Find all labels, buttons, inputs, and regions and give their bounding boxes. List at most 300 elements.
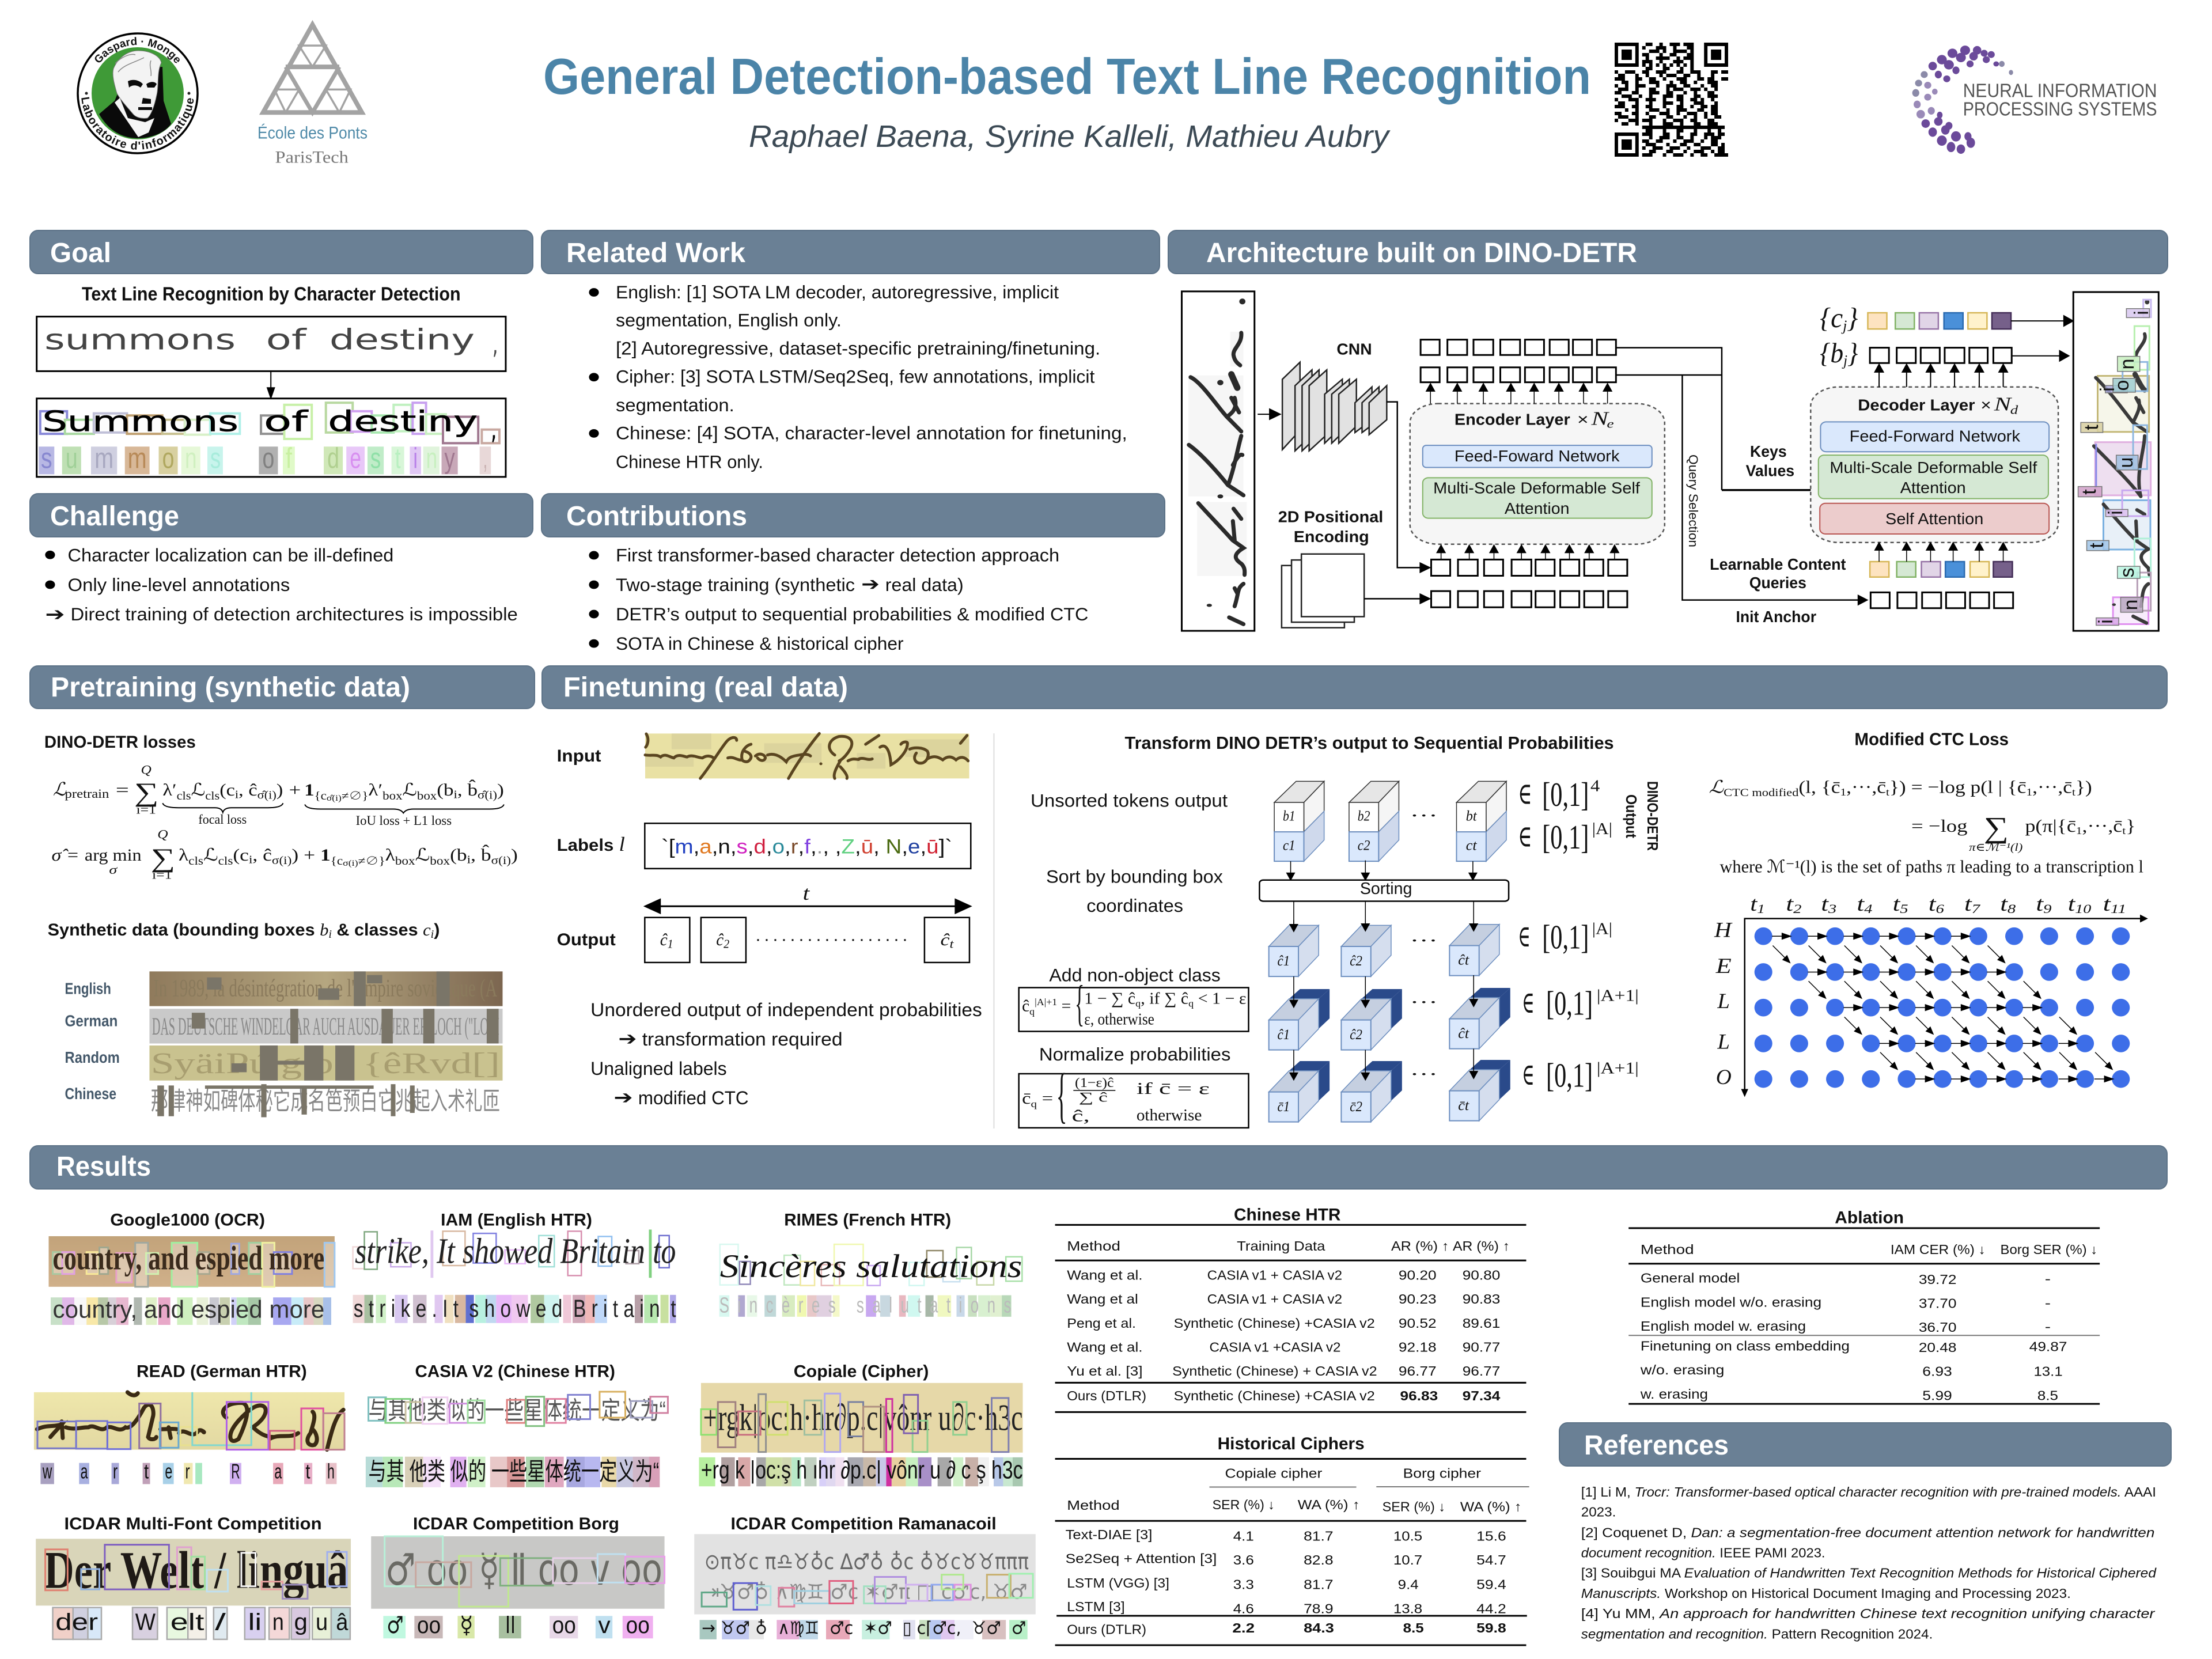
synthetic data heading: & classes [332, 920, 423, 940]
table: Ablation: 49.87 [2029, 1339, 2067, 1354]
pretraining content: DINO-DETR losses [44, 732, 196, 752]
sample: ICDAR Multi-Font: n [272, 1608, 284, 1635]
formula box: non-object class: ĉ [1022, 997, 1041, 1015]
character labels [1714, 918, 1733, 1089]
table: Ablation: English model w/o. erasing [1641, 1295, 1821, 1309]
labels row: Labels [557, 835, 613, 855]
table: Historical Ciphers: 44.2 [1476, 1601, 1506, 1616]
transform to sequential probabilities: [0,1] [1542, 918, 1589, 956]
table: Historical Ciphers: Ours (DTLR) [1067, 1622, 1146, 1637]
contributions bullets: SOTA in Chinese & historical cipher [616, 634, 904, 654]
table: Chinese HTR: 96.77 [1463, 1364, 1500, 1378]
formula: pretrain loss: ℒ [191, 781, 205, 800]
table: Ablation: 36.70 [1919, 1320, 1957, 1335]
formula box: non-object class: q [1135, 998, 1141, 1009]
table: Historical Ciphers: 4.6 [1233, 1601, 1254, 1616]
table: Historical Ciphers: LSTM [3] [1067, 1600, 1125, 1614]
qualitative results grid [36, 1210, 1036, 1639]
encoder layer: Feed-Foward Network [1455, 447, 1620, 465]
logo: Ecole des Ponts ParisTech: ParisTech [275, 147, 349, 166]
formula: matching: σ [109, 863, 118, 877]
contributions bullets: Two-stage training (synthetic [616, 575, 855, 595]
reference list: document recognition. IEEE PAMI 2023. [1581, 1545, 1825, 1560]
sample: ICDAR Multi-Font: li [248, 1608, 262, 1635]
formula: (l, {c̄ [1798, 778, 1840, 797]
transform to sequential probabilities: |A| [1592, 920, 1612, 938]
cubes: non-object class added: ĉ1 [1278, 1026, 1290, 1043]
encoder arrows [1426, 384, 1619, 559]
learnable content queries [1710, 543, 2012, 592]
cubes: unsorted output: ··· [1410, 806, 1438, 825]
table: Ablation: English model w. erasing [1641, 1319, 1806, 1334]
formula: pretrain loss: i [454, 789, 457, 801]
formula box: normalize: (1−ε)ĉ [1075, 1075, 1114, 1090]
table: Historical Ciphers: LSTM (VGG) [3] [1067, 1576, 1169, 1590]
formula: p(π|{c̄ [2025, 816, 2140, 836]
related work bullets: segmentation. [616, 395, 734, 415]
arrow [267, 371, 274, 399]
box tokens: } [1847, 338, 1858, 369]
cubes: unsorted output: ∈ [1518, 777, 1532, 810]
sample: READ labels: R [231, 1460, 240, 1483]
panel: contributions [541, 494, 1165, 654]
formula box: normalize [1019, 1061, 1249, 1129]
time axis labels: t [2036, 892, 2051, 915]
transform to sequential probabilities: < 1 − ε [1194, 990, 1246, 1007]
READ manuscript image [34, 1392, 344, 1450]
formula: pretrain loss: + [289, 781, 301, 800]
panel: results: → ♉♂ ♁ ∧♍♊ ♂c ✶♂ ▯ c⌈♂c, ♉♂ ♂ [702, 1618, 1026, 1638]
heading: results [30, 1146, 2167, 1189]
formula: pretrain loss: λ′ [368, 781, 382, 800]
panel: results: ⊙π♉c π♎♉♁c ∆♂♁ ♁c ♁♉c♉♉πππ [704, 1549, 1029, 1574]
formula: pretrain loss: ∑ [134, 778, 159, 807]
formula: pretrain loss: ℒ [403, 781, 417, 800]
table: Historical Ciphers: 2.2 [1232, 1621, 1255, 1635]
formula: pretrain loss: σ̂(i) [478, 789, 497, 801]
formula: ,···,c̄ [2032, 778, 2072, 797]
cubes: normalized: c̄2 [1350, 1098, 1362, 1115]
formula: matching: , b̂ [471, 844, 491, 865]
authors: Raphael Baena, Syrine Kalleli, Mathieu Aubry [749, 119, 1391, 154]
cubes: sorted probabilities [1269, 918, 1612, 976]
table: Chinese HTR: Yu et al. [3] [1067, 1364, 1143, 1378]
related work bullets: Chinese: [4] SOTA, character-level annotation for finetuning, [616, 423, 1127, 444]
formula [1709, 778, 2143, 876]
time axis labels: t [1786, 892, 1801, 915]
input handwriting image: destiny [329, 323, 475, 356]
CNN stack [1282, 340, 1387, 451]
modified CTC loss: L [1717, 989, 1730, 1013]
table: Ablation: Method [1641, 1243, 1694, 1257]
related work bullets: Cipher: [3] SOTA LSTM/Seq2Seq, few annotations, implicit [616, 367, 1094, 387]
sample: ICDAR Borg: oo [552, 1612, 576, 1638]
related work bullets [589, 282, 1127, 472]
time axis labels [1750, 892, 2126, 916]
synthetic data heading: ) [434, 920, 440, 940]
cubes: sorted probabilities: ∈ [1518, 919, 1531, 953]
cubes: unsorted output: c1 [1283, 837, 1296, 854]
logo: Gaspard Monge laboratory: Laboratoire d'informatique [81, 97, 194, 150]
panel: results: +rgk|oc:h·hr∂p.c|vônr u∂c·h3c [703, 1397, 1023, 1438]
output row [557, 918, 969, 963]
rotated output character labels: t [2078, 489, 2100, 495]
table: Historical Ciphers: 15.6 [1476, 1529, 1506, 1544]
box tokens: {b [1820, 338, 1862, 369]
transform to sequential probabilities: [0,1] [1542, 775, 1589, 813]
formula box: normalize: ĉ, [1072, 1107, 1090, 1125]
formula box: normalize: otherwise [1137, 1106, 1202, 1124]
learnable content queries: Learnable Content [1710, 555, 1846, 574]
logo: Gaspard Monge laboratory [77, 32, 199, 154]
formula: matching [52, 828, 518, 882]
formula: pretrain loss: IoU loss + L1 loss [356, 813, 452, 828]
notes: Unaligned labels [590, 1058, 727, 1079]
table: Ablation: 6.93 [1922, 1364, 1952, 1379]
table: Chinese HTR: 96.83 [1400, 1389, 1438, 1403]
sample: READ labels: READ (German HTR) [137, 1361, 307, 1381]
cubes: non-object class added: ··· [1410, 993, 1438, 1012]
decoder layer: Multi-Scale Deformable Self [1830, 459, 2037, 477]
table: Chinese HTR: 90.80 [1463, 1268, 1500, 1283]
sample: ICDAR Multi-Font: elt [171, 1608, 204, 1635]
arrow [1257, 409, 1280, 419]
formula: matching: arg min [85, 846, 142, 865]
formula box: non-object class: q [1029, 1006, 1035, 1017]
label: DINO-DETR output: Output [1623, 794, 1640, 838]
formula: pretrain loss: , ĉ [238, 781, 257, 800]
synthetic sample: German [65, 1009, 502, 1043]
goal content: Text Line Recognition by Character Detection [82, 283, 461, 305]
table: Historical Ciphers: 84.3 [1304, 1621, 1334, 1635]
sample: ICDAR Multi-Font: g [294, 1608, 308, 1635]
cubes: non-object class added: ĉt [1458, 1025, 1469, 1041]
synthetic data heading: c [423, 921, 431, 940]
transform to sequential probabilities: Normalize probabilities [1039, 1044, 1230, 1065]
qualitative results grid: h [327, 1460, 335, 1483]
formula: 1 [2027, 786, 2032, 798]
formula: matching: {c [331, 855, 343, 867]
heading: contributions [541, 494, 1165, 537]
box tokens: j [1842, 352, 1847, 369]
rotated output character labels: u [2115, 457, 2137, 468]
labels: keys values: Values [1746, 461, 1794, 480]
time axis labels: 5 [1900, 902, 1908, 916]
table: Historical Ciphers: 3.3 [1233, 1577, 1254, 1592]
cubes: sorted probabilities: ĉ1 [1278, 953, 1290, 969]
synthetic sample: Chinese: Chinese [65, 1085, 116, 1103]
heading: finetuning: Finetuning (real data) [563, 672, 848, 703]
label: query selection: Query Selection [1686, 454, 1700, 547]
time arrow [645, 882, 970, 913]
challenge bullets: Only line-level annotations [68, 575, 290, 595]
sample: READ labels: e [165, 1460, 172, 1483]
labels: keys values [1746, 442, 1794, 480]
formula: matching: i [467, 854, 471, 866]
cubes: normalized: c̄1 [1278, 1098, 1290, 1115]
sample: ICDAR Borg: ♂ [387, 1612, 404, 1639]
text: 那律神如碑体秘它成名笆预白它兆起入术礼匝 [151, 1087, 500, 1115]
formula: t [1886, 786, 1889, 798]
related work bullets: Chinese HTR only. [616, 452, 763, 472]
heading: challenge [30, 494, 533, 537]
notes: ➔ [618, 1028, 637, 1049]
heading: pretraining [30, 666, 535, 709]
heading: challenge: Challenge [50, 501, 179, 532]
table: Historical Ciphers: WA (%) ↑ [1298, 1497, 1360, 1512]
rotated output character labels: s [2116, 568, 2138, 577]
output with character boxes: e [350, 442, 361, 474]
table: Ablation: General model [1641, 1271, 1740, 1286]
table: Chinese HTR: Peng et al. [1067, 1316, 1136, 1331]
formula: matching: λ [385, 846, 395, 865]
decoder layer: Feed-Forward Network [1850, 427, 2021, 445]
sample: ICDAR Borg: ☿ [460, 1612, 473, 1639]
heading: results: Results [56, 1152, 151, 1182]
notes: Unordered output of independent probabilities [590, 999, 982, 1020]
table: Chinese HTR: Ours (DTLR) [1067, 1389, 1146, 1403]
table: Historical Ciphers: 10.7 [1393, 1553, 1422, 1567]
sample: ICDAR Borg: ICDAR Competition Borg [413, 1514, 619, 1533]
modified CTC loss: E [1715, 954, 1732, 978]
contributions bullets: First transformer-based character detection approach [616, 546, 1059, 566]
modified CTC loss: 11 [2111, 902, 2126, 916]
cubes: unsorted output: b1 [1283, 808, 1296, 824]
labels row: l [619, 833, 625, 855]
rotated output character labels [2078, 310, 2153, 624]
formula: 1 [2076, 825, 2082, 836]
formula: matching: σ(i) [491, 854, 511, 866]
input handwriting image: of [266, 323, 307, 356]
cubes: unsorted output: ct [1466, 837, 1478, 854]
table: Chinese HTR: 90.83 [1463, 1292, 1500, 1306]
table: Historical Ciphers: 54.7 [1476, 1553, 1506, 1567]
sorting block: Sorting [1360, 880, 1412, 898]
sample: IAM: IAM (English HTR) [441, 1210, 592, 1229]
output row: 1 [668, 938, 673, 951]
notes: modified CTC [638, 1088, 749, 1108]
synthetic sample: German: German [65, 1013, 118, 1030]
formula: }) = −log p(l | {c̄ [1889, 778, 2027, 797]
transform to sequential probabilities [1019, 733, 1639, 1129]
sample: IAM [353, 1210, 676, 1323]
formula: pretrain loss: λ′ [162, 781, 187, 800]
sample: ICDAR Multi-Font: der [55, 1608, 98, 1635]
output with character boxes: o [263, 442, 274, 474]
panel: related work [541, 230, 1160, 472]
output row: 2 [724, 938, 729, 951]
time axis labels: 1 [1757, 902, 1765, 916]
table: Chinese HTR: 90.77 [1463, 1340, 1500, 1355]
related work bullets: segmentation, English only. [616, 310, 842, 331]
formula: pretrain loss: pretrain [65, 787, 109, 801]
panel: finetuning [542, 666, 2167, 1129]
formula box: normalize: if c̄ = ε [1137, 1080, 1210, 1098]
output with character boxes: y [444, 442, 455, 474]
formula: matching: cls [188, 855, 203, 867]
formula box: non-object class: q [1188, 998, 1194, 1009]
transform to sequential probabilities: Unsorted tokens output [1031, 791, 1228, 811]
table: Ablation: w/o. erasing [1640, 1363, 1724, 1377]
time axis labels: t [2068, 892, 2083, 915]
table: Ablation: IAM CER (%) ↓ [1891, 1243, 1986, 1257]
qualitative results grid: country, and espied more [53, 1238, 324, 1277]
formula: matching: i=1 [152, 868, 172, 882]
sample: ICDAR Borg: v [599, 1612, 611, 1638]
sample: ICDAR Multi-Font: ICDAR Multi-Font Competition [64, 1514, 322, 1533]
table: Chinese HTR: AR (%) ↑ [1453, 1239, 1510, 1253]
encoder layer: Encoder Layer [1455, 411, 1570, 429]
table: Historical Ciphers: 81.7 [1304, 1577, 1334, 1592]
qualitative results grid: 与其他类似的一些星体统一定义为“ [369, 1397, 666, 1425]
table: Ablation: - [2045, 1272, 2051, 1286]
time axis labels: 6 [1936, 902, 1944, 916]
rotated output character labels: n [2120, 600, 2142, 610]
formula: pretrain loss: ≠∅} [342, 790, 368, 802]
finetuning left column [557, 733, 994, 1128]
sample: ICDAR Multi-Font [36, 1514, 351, 1639]
qualitative results grid: s t r i k e . I t s h o w e d B r i t a i n t [354, 1295, 676, 1322]
output row: Output [557, 930, 616, 949]
heading: architecture [1168, 230, 2168, 274]
icon: dotted arc [1912, 46, 2013, 154]
contributions bullets: ➔ [861, 574, 880, 595]
output with character boxes: , [491, 413, 497, 446]
table: Historical Ciphers: 9.4 [1398, 1577, 1419, 1592]
output with character boxes: i [414, 442, 418, 474]
contributions bullets [589, 546, 1088, 654]
heading: goal: Goal [50, 238, 111, 268]
synthetic sample: Random: SyäiPú g b? {êRvd[] [151, 1047, 500, 1080]
decoder layer: Attention [1900, 479, 1966, 497]
output with character boxes: n [185, 442, 197, 474]
sample: ICDAR Borg [371, 1514, 665, 1639]
alignment path arrows [1772, 933, 2113, 1082]
formula: pretrain loss: ) [276, 781, 283, 800]
formula: pretrain loss: (b [437, 781, 454, 800]
table: Historical Ciphers: SER (%) ↓ [1382, 1499, 1445, 1514]
formula: 1 [1840, 786, 1846, 798]
time axis labels: t [1964, 892, 1979, 915]
table: Chinese HTR: Wang et al. [1067, 1340, 1143, 1355]
formula: pretrain loss: σ̂(i) [327, 794, 342, 803]
sample: ICDAR Ramanacoil: ICDAR Competition Ramanacoil [731, 1514, 997, 1533]
cubes: sorted probabilities: ··· [1410, 931, 1438, 950]
formula: pretrain loss: = [116, 781, 129, 800]
table: Ablation: Ablation [1835, 1208, 1904, 1227]
synthetic sample: English [65, 971, 502, 1006]
time axis labels: t [1821, 892, 1836, 915]
modified CTC loss [1709, 729, 2147, 1096]
transform to sequential probabilities: Sort by bounding box [1046, 866, 1223, 887]
time axis labels: t [1750, 892, 1765, 915]
panel: finetuning: |A+1| [1597, 1059, 1639, 1077]
formula: matching: Q [157, 828, 168, 842]
synthetic sample: English: English [65, 980, 111, 998]
formula: matching: 1 [320, 846, 331, 865]
formula: matching: (c [233, 846, 249, 865]
CNN stack: CNN [1336, 340, 1372, 358]
axes [1741, 915, 2147, 1096]
formula: matching: box [395, 855, 415, 867]
cubes: normalized [1269, 1049, 1639, 1122]
table: Ablation: w. erasing [1640, 1387, 1708, 1402]
output with character boxes: s [41, 442, 52, 474]
formula: } [2126, 816, 2135, 836]
sample: Google1000: Google1000 (OCR) [110, 1210, 265, 1229]
table: Historical Ciphers: Text-DIAE [3] [1066, 1528, 1152, 1542]
table: Historical Ciphers: 13.8 [1393, 1601, 1422, 1616]
decoder layer: Self Attention [1885, 510, 1983, 528]
challenge bullets: Direct training of detection architectures is impossible [70, 604, 518, 624]
formula: matching: box [430, 855, 450, 867]
rotated output character labels: i [2131, 310, 2153, 315]
formula: matching: σ(i) [272, 854, 291, 866]
decoder layer: × [1980, 396, 1991, 414]
panel: finetuning: |A+1| [1597, 986, 1639, 1005]
formula: matching: σ̂ = [52, 846, 79, 865]
formula: matching: ≠∅} [358, 855, 385, 867]
cubes: sorted probabilities: ĉt [1458, 952, 1469, 968]
formula: pretrain loss: 1 [304, 781, 315, 800]
time axis labels: 3 [1828, 902, 1836, 916]
logo: Neural Information Processing Systems [1912, 46, 2157, 154]
table: Ablation: Finetuning on class embedding [1641, 1339, 1850, 1353]
formula: pretrain loss: focal loss [198, 812, 247, 827]
time axis labels: t [1893, 892, 1908, 915]
decoder layer: N [1994, 393, 2013, 415]
step labels [1031, 791, 1230, 1065]
table: Chinese HTR: Training Data [1237, 1239, 1325, 1253]
formula: }) [2075, 778, 2092, 797]
time arrow: t [803, 882, 810, 904]
cubes: unsorted output: bt [1466, 808, 1478, 824]
sorting block [1259, 861, 1509, 932]
panel: results [30, 1146, 2167, 1645]
formula box: non-object class: |A|+1 [1035, 997, 1057, 1007]
table: Ablation: 37.70 [1919, 1296, 1957, 1311]
QR code [1615, 43, 1728, 157]
challenge bullets [45, 546, 518, 625]
sample: ICDAR Multi-Font: / [215, 1608, 226, 1635]
table: Chinese HTR: 90.52 [1399, 1316, 1437, 1331]
sample: ICDAR Borg: oo [417, 1612, 441, 1638]
transform to sequential probabilities: [0,1] [1542, 818, 1589, 856]
formula: matching: i [249, 854, 252, 866]
formula: ∑ [1984, 811, 2009, 844]
sample: READ labels: w [43, 1460, 52, 1483]
encoder layer: Attention [1505, 499, 1569, 518]
heading: related work [541, 230, 1160, 274]
panel: results: S i n c è r e s s a l u t a t i o n s [719, 1293, 1012, 1317]
text: DAS DEUTSCHE WINDELGAR AUCH AUSDAUER ER LOCH ("LOLI [152, 1012, 499, 1040]
sample: ICDAR Borg: oo [626, 1612, 650, 1638]
formula: pretrain loss: box [382, 790, 403, 802]
table: Chinese HTR: 90.23 [1399, 1292, 1437, 1306]
decoder layer: d [2010, 404, 2018, 416]
logo: Ecole des Ponts ParisTech: École des Ponts [257, 123, 368, 142]
sample: ICDAR Ramanacoil [694, 1514, 1036, 1639]
formula: pretrain loss: Q [141, 763, 151, 777]
formula: = −log [1911, 816, 1967, 836]
table: Historical Ciphers: 59.4 [1476, 1577, 1506, 1592]
synthetic sample: Chinese [65, 1084, 500, 1117]
formula box: normalize: = [1037, 1089, 1053, 1108]
cubes: normalized: [0,1] [1546, 1056, 1593, 1094]
panel: references [1559, 1423, 2171, 1641]
labels: keys values: Keys [1750, 442, 1787, 461]
formula box: normalize: c̄ [1022, 1089, 1041, 1108]
